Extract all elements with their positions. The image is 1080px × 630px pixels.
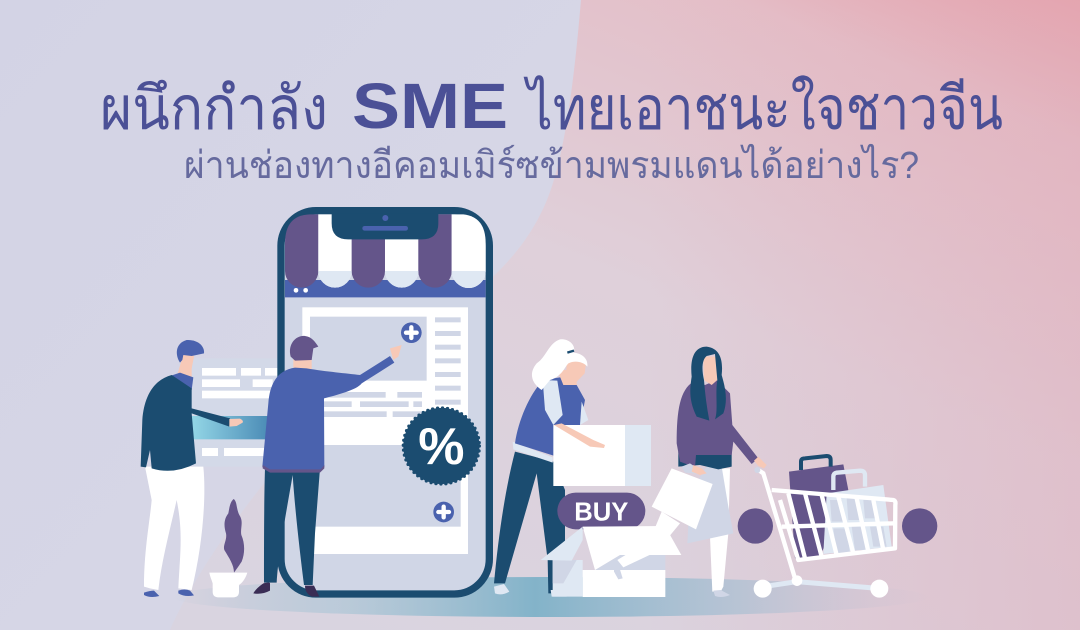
subtitle: ผ่านช่องทางอีคอมเมิร์ซข้ามพรมแดนได้อย่างไร? bbox=[184, 144, 919, 187]
man pointing at phone bbox=[253, 336, 402, 597]
title bbox=[100, 70, 1003, 187]
buy label bbox=[557, 493, 645, 529]
discount badge: % bbox=[418, 418, 464, 476]
purple dot left bbox=[738, 508, 773, 544]
open box bbox=[541, 526, 681, 597]
purple dot right bbox=[902, 508, 937, 544]
carried box bbox=[553, 423, 651, 486]
smartphone bbox=[281, 211, 489, 594]
shopping bag in hand bbox=[614, 463, 713, 579]
plus button bottom bbox=[433, 502, 454, 522]
illustration right: women and shopping items bbox=[494, 339, 937, 598]
plus button top bbox=[401, 322, 422, 343]
illustration left: phone and two men bbox=[141, 211, 489, 597]
potted plant bbox=[209, 499, 247, 597]
woman with cart bbox=[677, 347, 767, 597]
product card bbox=[302, 307, 468, 554]
shopping cart bbox=[754, 456, 895, 598]
buy label: BUY bbox=[574, 498, 628, 526]
floor shadow bbox=[172, 577, 928, 617]
man with credit card bbox=[141, 340, 243, 597]
discount badge bbox=[403, 408, 479, 484]
shop awning bbox=[285, 214, 486, 297]
headline left part: ผนึกกำลัง bbox=[100, 75, 328, 142]
headline right part: ไทยเอาชนะใจชาวจีน bbox=[524, 74, 1003, 142]
phone notch bbox=[332, 213, 438, 239]
headline SME: SME bbox=[352, 70, 508, 142]
credit card behind men bbox=[192, 358, 288, 467]
woman with box bbox=[494, 339, 588, 597]
